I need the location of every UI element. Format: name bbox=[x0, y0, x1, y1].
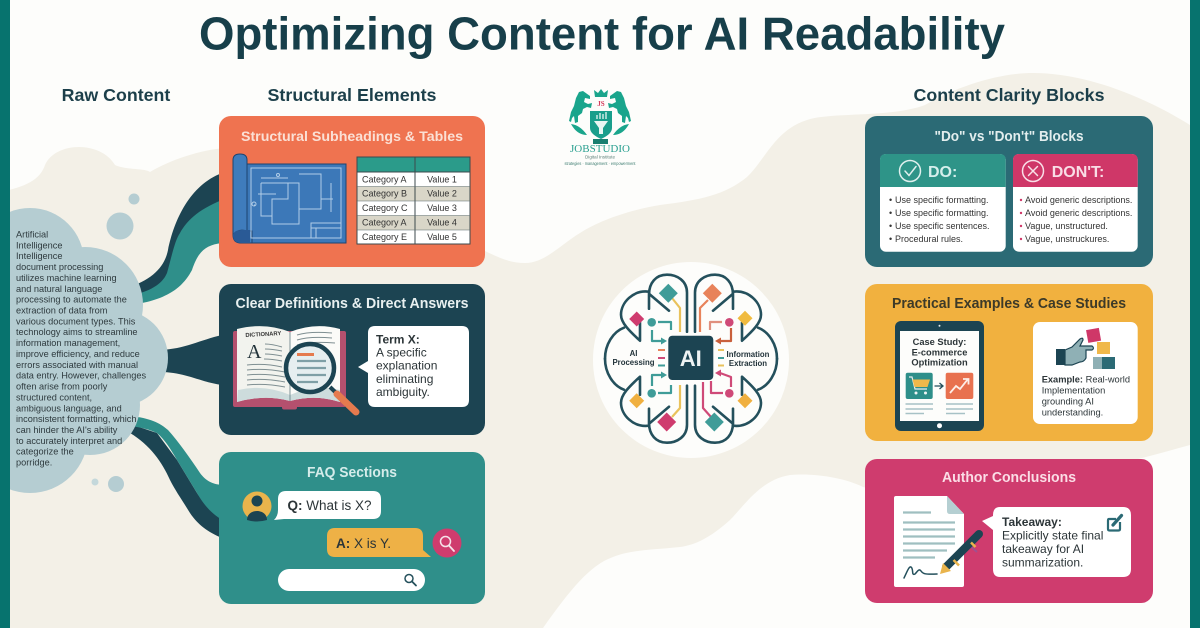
left accent bar bbox=[0, 0, 10, 628]
case study text: E-commerce bbox=[912, 347, 967, 357]
logo wordmark: JOBSTUDIO bbox=[570, 144, 630, 155]
connector ribbons bbox=[130, 173, 222, 538]
callout: term definition: explanation bbox=[376, 359, 437, 373]
raw content text: inconsistent formatting, which bbox=[16, 414, 137, 424]
tablet case study bbox=[895, 321, 984, 431]
table rows: Value 4 bbox=[427, 217, 457, 227]
icon: cross circle bbox=[1022, 160, 1044, 182]
panel: clear definitions and direct answers bbox=[219, 284, 485, 435]
brain outline bbox=[605, 275, 777, 443]
callout: term definition: eliminating bbox=[376, 372, 433, 386]
callout: term definition bbox=[358, 326, 469, 407]
answer bubble bbox=[327, 528, 431, 557]
do list: Use specific formatting. bbox=[895, 208, 989, 218]
question bubble: Q: What is X? bbox=[288, 498, 372, 513]
label: AI processing: Processing bbox=[612, 358, 655, 367]
table rows: Category A bbox=[362, 217, 407, 227]
raw content text: Artificial bbox=[16, 230, 48, 240]
panel heading: Author Conclusions bbox=[942, 470, 1076, 486]
dictionary label: DICTIONARY bbox=[245, 331, 282, 339]
logo monogram: JS bbox=[597, 100, 605, 108]
letter A: A bbox=[247, 341, 262, 363]
icon: dictionary with magnifier bbox=[233, 326, 356, 412]
panel: author conclusions bbox=[865, 459, 1153, 603]
don't list: Avoid generic descriptions. bbox=[1025, 195, 1132, 205]
panel: structural subheadings and tables bbox=[219, 116, 485, 267]
table rows bbox=[362, 174, 457, 242]
panel heading: Clear Definitions & Direct Answers bbox=[236, 296, 468, 312]
circuit nodes bbox=[647, 318, 734, 398]
callout: takeaway: Explicitly state final bbox=[1002, 528, 1103, 542]
do list: • bbox=[889, 208, 892, 218]
callout: term definition: Term X: bbox=[376, 332, 420, 346]
panel heading: Structural Subheadings & Tables bbox=[241, 128, 463, 144]
heading: content clarity blocks: Content Clarity Blocks bbox=[914, 85, 1105, 105]
don't list: Vague, unstruckures. bbox=[1025, 234, 1109, 244]
icon: blueprint bbox=[233, 154, 346, 243]
raw content text: utilizes machine learning bbox=[16, 273, 117, 283]
raw content text: data entry. However, challenges bbox=[16, 371, 146, 381]
do label: DO: bbox=[928, 164, 957, 181]
logo strapline: strategies · management · empowerment bbox=[564, 161, 636, 166]
case study text: Optimization bbox=[911, 358, 968, 368]
example text: Implementation bbox=[1042, 386, 1105, 396]
logo tagline: Digital Institute bbox=[585, 154, 616, 160]
raw content text: ambiguous language, and bbox=[16, 403, 122, 413]
title: Optimizing Content for AI Readability bbox=[199, 8, 1005, 60]
heading: structural elements: Structural Elements bbox=[268, 85, 437, 105]
icon: search badge bbox=[432, 528, 462, 558]
don't list bbox=[1020, 195, 1132, 244]
raw content text: porridge. bbox=[16, 458, 52, 468]
callout: takeaway: summarization. bbox=[1002, 556, 1083, 570]
table rows: Category E bbox=[362, 232, 407, 242]
arrow: cart to growth bbox=[934, 383, 943, 389]
raw content text: often arise from poorly bbox=[16, 382, 108, 392]
do block bbox=[880, 154, 1006, 252]
table rows: Value 1 bbox=[427, 174, 457, 184]
icon: edit bbox=[1108, 516, 1122, 530]
raw content text: technology aims to streamline bbox=[16, 327, 138, 337]
don't list: Vague, unstructured. bbox=[1025, 221, 1108, 231]
callout: term definition: ambiguity. bbox=[376, 385, 430, 399]
raw content text: extraction of data from bbox=[16, 306, 108, 316]
table rows: Value 5 bbox=[427, 232, 457, 242]
example text: grounding AI bbox=[1042, 396, 1094, 406]
example card bbox=[1033, 322, 1138, 424]
icon: growth chart bbox=[946, 373, 973, 399]
central AI brain diagram bbox=[593, 262, 789, 458]
question bubble bbox=[274, 491, 381, 520]
raw content text: information management, bbox=[16, 338, 120, 348]
logo: jobstudio crest bbox=[564, 89, 636, 166]
raw content text: Intelligence bbox=[16, 251, 62, 261]
case study text: Case Study: bbox=[913, 337, 966, 347]
do list: • bbox=[889, 195, 892, 205]
callout: takeaway bbox=[982, 507, 1131, 577]
search bar bbox=[278, 569, 425, 591]
AI chip bbox=[668, 336, 713, 380]
don't list: Avoid generic descriptions. bbox=[1025, 208, 1132, 218]
diamonds bbox=[629, 284, 752, 432]
do list: Procedural rules. bbox=[895, 234, 963, 244]
table rows: Category B bbox=[362, 189, 407, 199]
right accent bar bbox=[1190, 0, 1200, 628]
table bbox=[357, 157, 470, 244]
raw content text: document processing bbox=[16, 262, 103, 272]
raw content text: to accurately interpret and bbox=[16, 436, 122, 446]
panel: do vs don't blocks bbox=[865, 116, 1153, 267]
heading: raw content: Raw Content bbox=[62, 85, 170, 105]
icon: user avatar bbox=[242, 492, 272, 522]
label: information extraction: Information bbox=[727, 350, 770, 359]
raw content text: can hinder the AI's ability bbox=[16, 425, 118, 435]
panel: FAQ sections bbox=[219, 452, 485, 604]
callout: takeaway: Takeaway: bbox=[1002, 515, 1062, 529]
circuit arrowheads bbox=[661, 338, 721, 378]
don't block bbox=[1013, 154, 1138, 252]
raw content text: structured content, bbox=[16, 392, 92, 402]
circuit traces bbox=[652, 298, 731, 417]
label: information extraction: Extraction bbox=[729, 359, 767, 368]
icon: signed document with pen bbox=[894, 496, 979, 587]
table rows: Category C bbox=[362, 203, 408, 213]
circuit dashes bbox=[658, 350, 724, 366]
raw content text: Intelligence bbox=[16, 240, 62, 250]
icon: hand and blocks bbox=[1056, 328, 1115, 369]
raw content text: categorize the bbox=[16, 447, 74, 457]
AI chip: AI bbox=[680, 346, 702, 371]
table rows: Category A bbox=[362, 174, 407, 184]
table rows: Value 3 bbox=[427, 203, 457, 213]
panel heading: "Do" vs "Don't" Blocks bbox=[934, 129, 1084, 145]
callout: term definition: A specific bbox=[376, 346, 427, 360]
icon: cart bbox=[906, 373, 933, 399]
panel: practical examples and case studies bbox=[865, 284, 1153, 441]
callout: takeaway: takeaway for AI bbox=[1002, 542, 1084, 556]
raw content text: various document types. This bbox=[16, 316, 136, 326]
label: AI processing: AI bbox=[630, 349, 637, 358]
raw content text: errors associated with manual bbox=[16, 360, 138, 370]
raw content text: and natural language bbox=[16, 284, 102, 294]
example text: Example: Real-world bbox=[1042, 374, 1130, 384]
do list: Use specific sentences. bbox=[895, 221, 990, 231]
example text: understanding. bbox=[1042, 408, 1103, 418]
panel heading: Practical Examples & Case Studies bbox=[892, 295, 1126, 312]
raw content blob bbox=[0, 194, 168, 493]
icon: check circle bbox=[900, 160, 920, 182]
do list bbox=[889, 195, 990, 244]
do list: Use specific formatting. bbox=[895, 195, 989, 205]
answer bubble: A: X is Y. bbox=[336, 536, 391, 551]
do list: • bbox=[889, 234, 892, 244]
do list: • bbox=[889, 221, 892, 231]
raw content text: improve efficiency, and reduce bbox=[16, 349, 140, 359]
table rows: Value 2 bbox=[427, 189, 457, 199]
don't label: DON'T: bbox=[1052, 164, 1104, 181]
raw content text: processing to automate the bbox=[16, 295, 127, 305]
panel heading: FAQ Sections bbox=[307, 465, 397, 481]
